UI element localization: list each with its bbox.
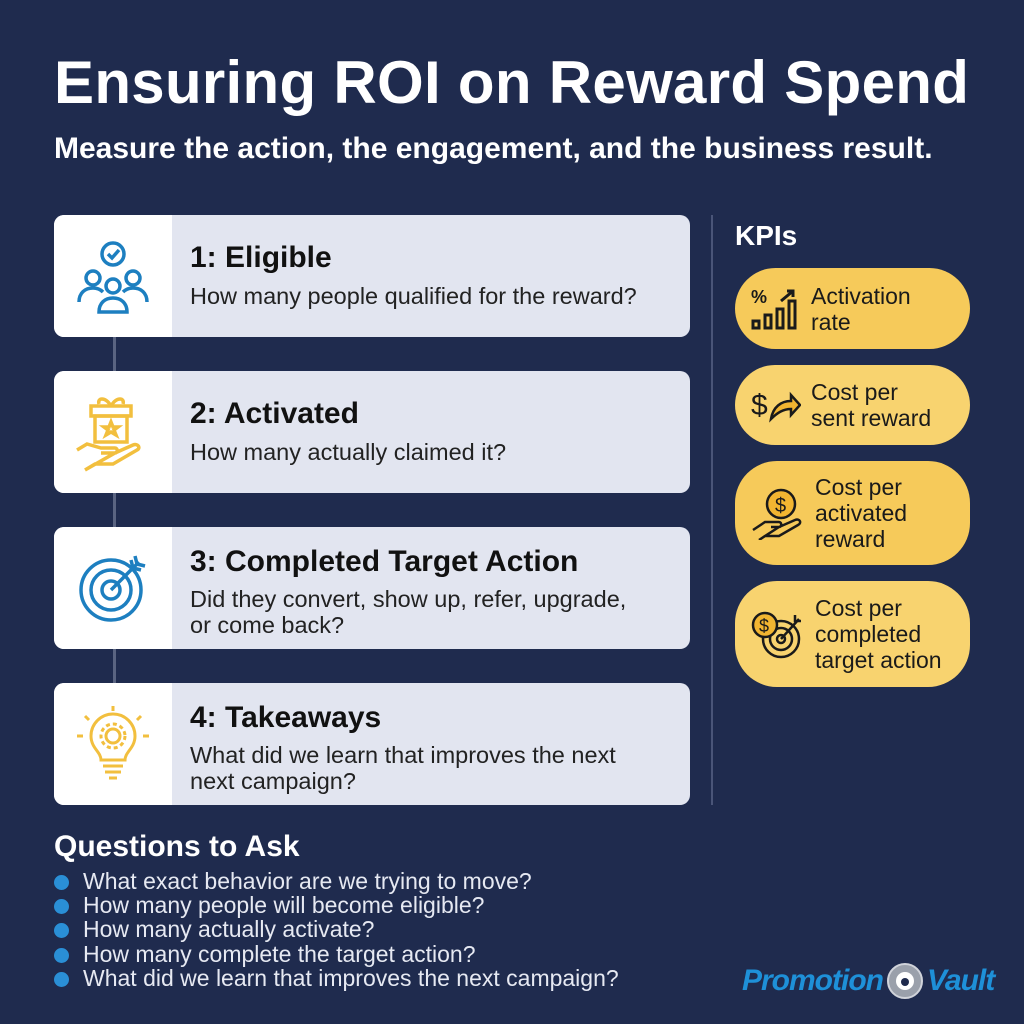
questions list bbox=[54, 868, 619, 991]
questions list: What exact behavior are we trying to move? bbox=[83, 868, 532, 894]
subtitle: Measure the action, the engagement, and the business result. bbox=[54, 132, 933, 165]
card: completed target action bbox=[54, 527, 690, 649]
card: eligible: How many people qualified for the reward? bbox=[190, 283, 637, 309]
kpi: cost per sent reward: sent reward bbox=[811, 405, 931, 431]
questions list: How many complete the target action? bbox=[83, 941, 475, 967]
card: takeaways: What did we learn that improves the next bbox=[190, 742, 616, 768]
kpi: cost per completed target action: $ bbox=[759, 616, 769, 636]
questions heading: Questions to Ask bbox=[54, 830, 300, 863]
questions list: How many actually activate? bbox=[83, 916, 374, 942]
card: activated: How many actually claimed it? bbox=[190, 439, 506, 465]
kpi: activation rate: Activation bbox=[811, 282, 911, 308]
icon: people check bbox=[54, 215, 172, 337]
divider bbox=[711, 215, 713, 805]
card: completed target action: or come back? bbox=[190, 612, 344, 638]
kpi: cost per activated reward: activated bbox=[815, 500, 907, 526]
icon: target bbox=[54, 527, 172, 649]
kpi: cost per sent reward bbox=[735, 365, 970, 445]
logo: Promotion Vault bbox=[742, 964, 994, 997]
icon: gift in hand bbox=[54, 371, 172, 493]
kpi: cost per completed target action: completed bbox=[815, 621, 921, 647]
kpi: activation rate: rate bbox=[811, 308, 851, 334]
kpi: cost per sent reward: Cost per bbox=[811, 379, 898, 405]
connector line bbox=[113, 330, 116, 690]
kpi: cost per activated reward bbox=[735, 461, 970, 565]
card: activated bbox=[54, 371, 690, 493]
kpi: cost per activated reward: $ bbox=[775, 495, 786, 517]
title: Ensuring ROI on Reward Spend bbox=[54, 49, 969, 116]
card: completed target action: Did they convert, show up, refer, upgrade, bbox=[190, 586, 626, 612]
kpi: cost per sent reward: $ bbox=[751, 389, 768, 422]
kpi: cost per activated reward: reward bbox=[815, 526, 885, 552]
card: activated: 2: Activated bbox=[190, 397, 359, 430]
card: takeaways: 4: Takeaways bbox=[190, 701, 381, 734]
card: eligible bbox=[54, 215, 690, 337]
kpi: activation rate: % bbox=[751, 286, 767, 306]
card: completed target action: 3: Completed Target Action bbox=[190, 545, 578, 578]
card: takeaways bbox=[54, 683, 690, 805]
kpi: cost per completed target action: Cost per bbox=[815, 595, 902, 621]
KPIs heading: KPIs bbox=[735, 220, 797, 251]
kpi: activation rate bbox=[735, 268, 970, 349]
kpi: cost per activated reward: Cost per bbox=[815, 474, 902, 500]
kpi: cost per completed target action bbox=[735, 581, 970, 687]
card: takeaways: next campaign? bbox=[190, 768, 356, 794]
icon: lightbulb bbox=[54, 683, 172, 805]
card: eligible: 1: Eligible bbox=[190, 241, 332, 274]
questions list: How many people will become eligible? bbox=[83, 892, 484, 918]
questions list: What did we learn that improves the next campaign? bbox=[83, 965, 619, 991]
kpi: cost per completed target action: target action bbox=[815, 647, 942, 673]
